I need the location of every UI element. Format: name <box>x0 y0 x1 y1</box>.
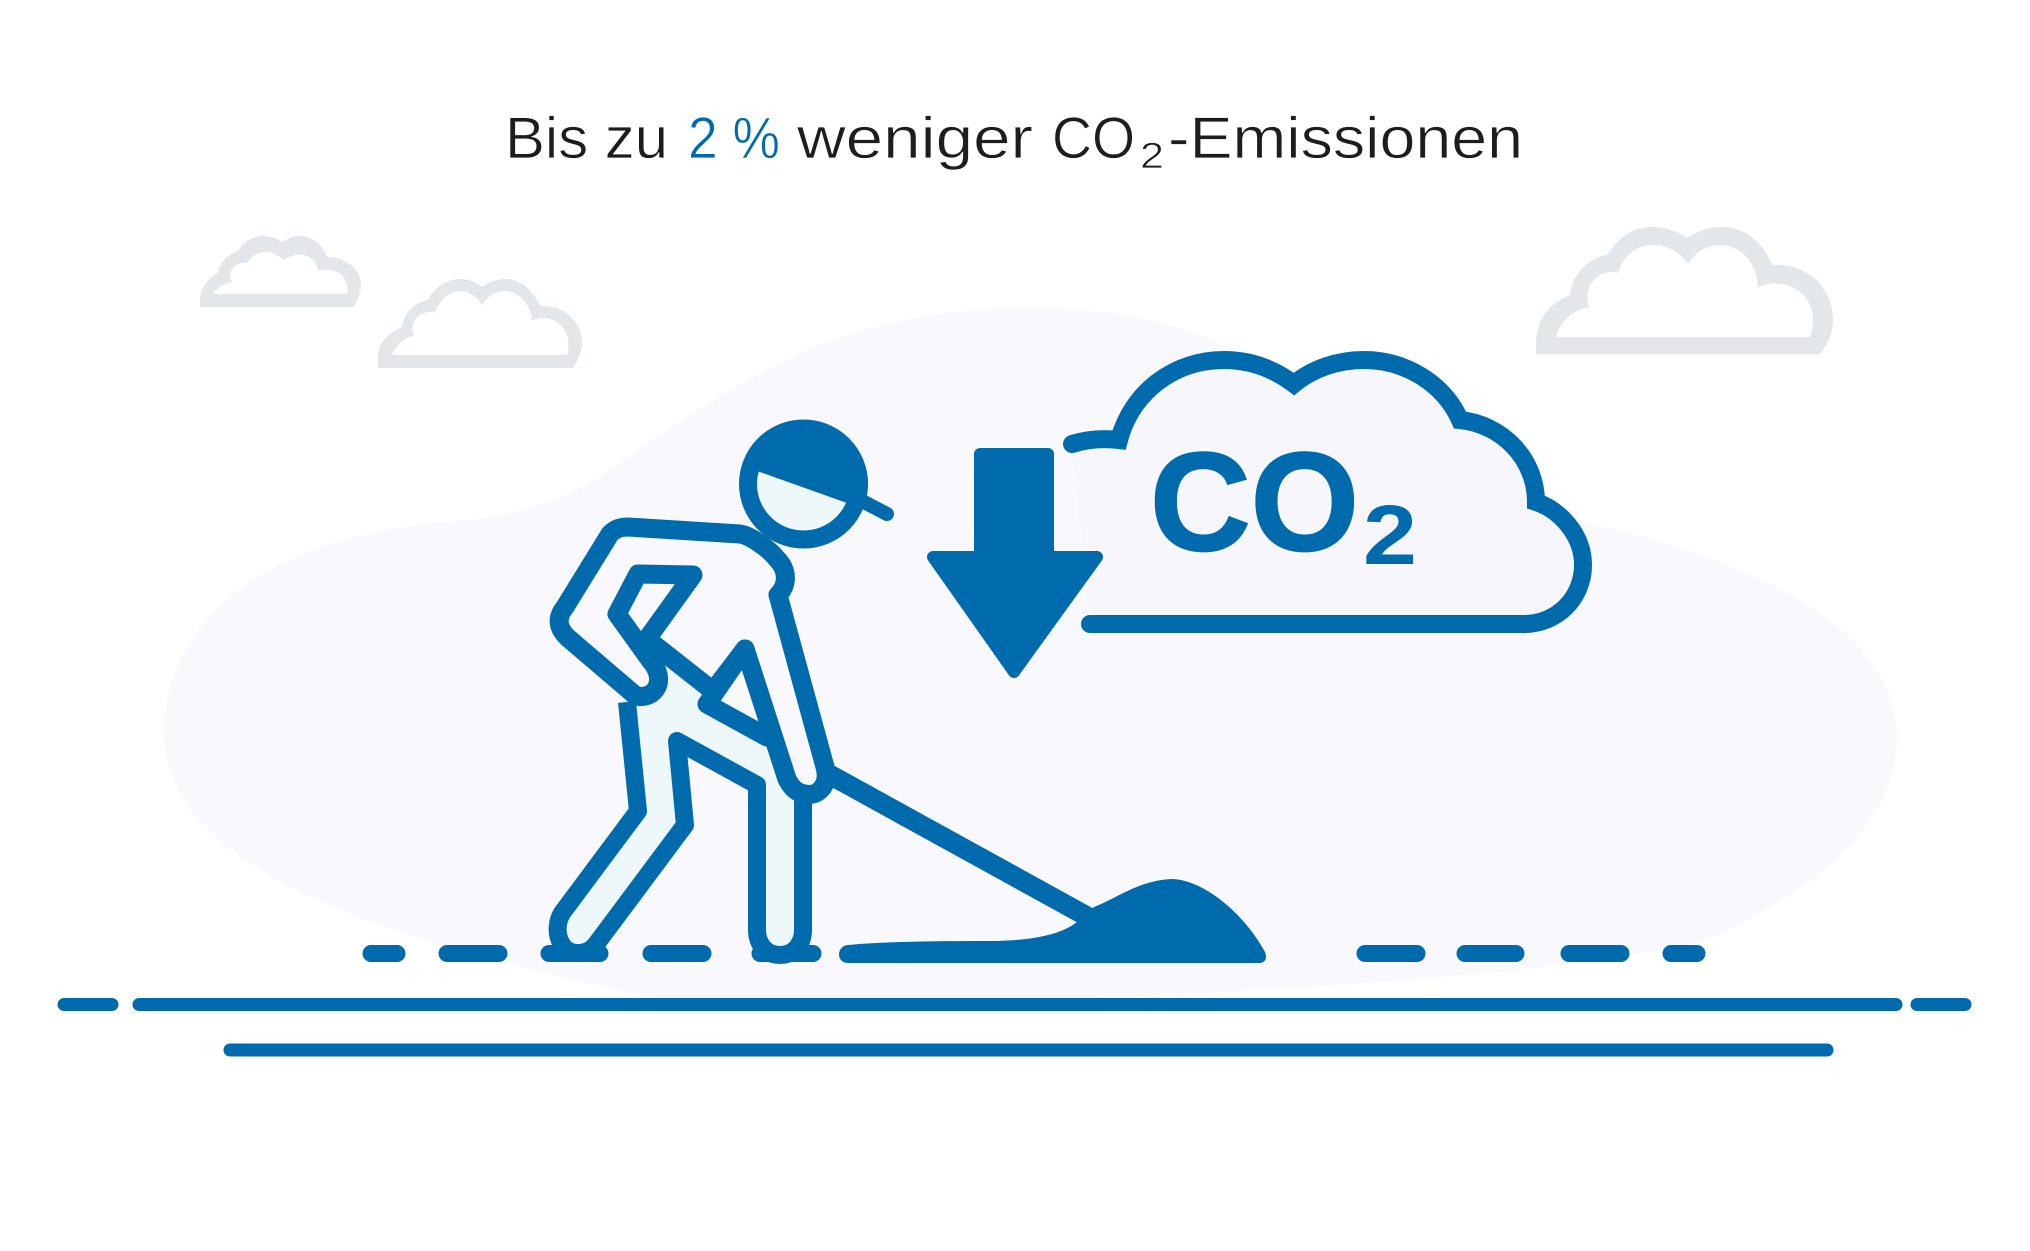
title: -Emissionen <box>1168 106 1523 171</box>
title: weniger <box>796 106 1033 171</box>
title <box>505 106 1523 176</box>
cloud: small left <box>378 279 582 368</box>
soil mound <box>839 879 1266 963</box>
cap <box>757 420 868 506</box>
torso and arms <box>559 527 826 794</box>
arm and hip lines <box>707 649 787 779</box>
CO2 subscript: 2 <box>1363 488 1417 582</box>
legs fill <box>558 655 803 955</box>
ground lines <box>64 954 1965 1050</box>
down arrow <box>933 454 1097 672</box>
cloud: large right <box>1536 227 1833 354</box>
cloud: small far left <box>200 236 361 307</box>
CO2 label: CO <box>1150 423 1359 580</box>
shovel handle <box>825 772 1088 917</box>
background blob <box>164 308 1897 1001</box>
cap brim <box>862 501 887 514</box>
worker <box>558 420 887 955</box>
CO2 cloud outline <box>1072 360 1583 624</box>
head <box>748 428 859 540</box>
title: Bis zu <box>505 106 668 171</box>
legs outline <box>558 702 803 955</box>
title: CO <box>1052 106 1135 171</box>
torso gap triangle <box>707 649 787 779</box>
title: 2 % <box>688 106 780 171</box>
CO2 cloud with arrow <box>933 360 1583 672</box>
title: 2 <box>1140 135 1164 176</box>
shovel and mound <box>825 772 1266 963</box>
